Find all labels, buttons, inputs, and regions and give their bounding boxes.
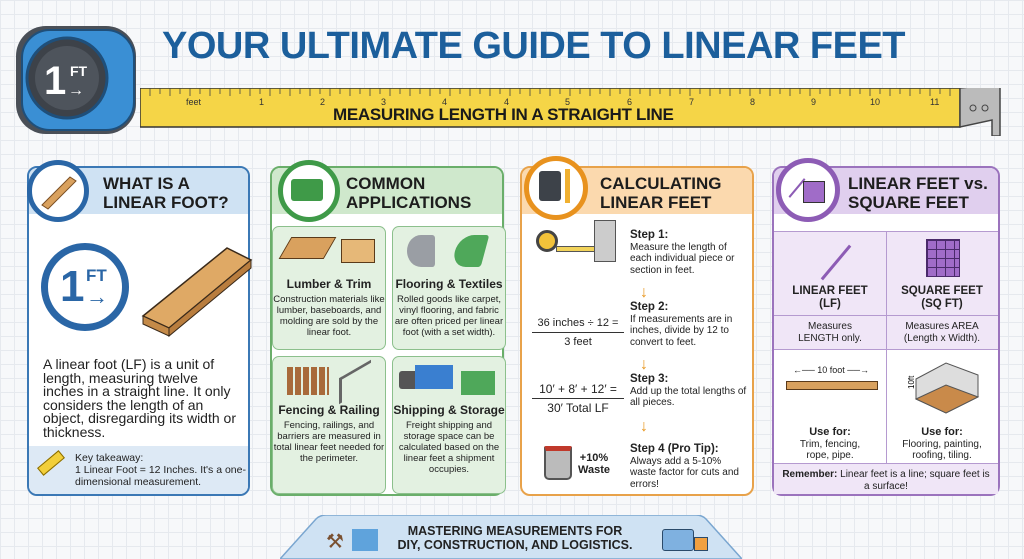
comparison grid: roofing, tiling. — [912, 450, 972, 461]
step 2: If measurements are in inches, divide by 12 to convert to feet. — [630, 314, 732, 348]
heading — [346, 174, 471, 212]
definition text: A linear foot (LF) is a unit of length, measuring twelve inches in a straight line. It only considers the length of an object, disregarding its width or thickness. — [43, 356, 236, 440]
icon: tape measure body — [16, 26, 136, 134]
tape ruler: 4 — [442, 97, 447, 107]
icon: 1 FT: → — [86, 284, 108, 309]
icon: toolbox — [278, 160, 340, 222]
tape ruler: 2 — [320, 97, 325, 107]
step 3 — [630, 373, 746, 408]
icon: room floor — [907, 362, 980, 414]
key takeaway — [29, 446, 248, 494]
comparison grid: (Length x Width). — [904, 332, 980, 344]
equation 2: 10′ + 8′ + 12′ = — [539, 382, 617, 396]
tape ruler — [140, 88, 1001, 136]
waste label: +10% — [580, 452, 608, 464]
heading — [103, 174, 229, 212]
label SQ FT — [901, 285, 983, 310]
comparison grid: Flooring, painting, — [902, 438, 982, 450]
card: fencing: Fencing & Railing — [278, 403, 380, 417]
arrow: ↓ — [640, 284, 648, 301]
subtitle: MEASURING LENGTH IN A STRAIGHT LINE — [333, 105, 674, 124]
comparison grid: Measures AREA — [905, 321, 979, 332]
card: shipping: Shipping & Storage — [393, 403, 505, 417]
white lower cells — [774, 350, 886, 463]
label LF: LINEAR FEET — [792, 285, 868, 297]
heading: CALCULATING — [600, 174, 722, 193]
tape ruler: 8 — [750, 97, 755, 107]
card: flooring: Flooring & Textiles — [395, 277, 503, 291]
card: lumber: Construction materials like lumber, baseboards, and molding are sold by the linear foot. — [273, 294, 385, 338]
tape ruler: 9 — [811, 97, 816, 107]
equation 1 — [532, 317, 624, 348]
tape ruler: 5 — [565, 97, 570, 107]
key takeaway: 1 Linear Foot = 12 Inches. It's a one-dimensional measurement. — [75, 464, 246, 488]
card: fencing — [272, 356, 386, 494]
tape ruler: 4 — [504, 97, 509, 107]
footer text: MASTERING MEASUREMENTS FOR — [408, 524, 622, 538]
equation 1: 36 inches ÷ 12 = — [538, 317, 618, 329]
comparison grid: Measures — [808, 321, 852, 332]
icon: 1 FT: 1 — [60, 262, 84, 311]
card: shipping: Freight shipping and storage space can be calculated based on the linear feet a shipment occupies. — [399, 420, 499, 475]
step 3: Step 3: — [630, 373, 668, 385]
icon: 1 FT — [41, 243, 129, 331]
key takeaway: Key takeaway: — [75, 452, 143, 464]
icon: wooden plank — [142, 247, 252, 337]
footer text: DIY, CONSTRUCTION, AND LOGISTICS. — [398, 538, 632, 552]
comparison grid: Use for: — [921, 426, 963, 438]
label SQ FT: SQUARE FEET — [901, 285, 983, 297]
comparison grid: Trim, fencing, — [800, 438, 860, 450]
icon: 1 FT: FT — [86, 266, 107, 285]
tape ruler: feet — [186, 97, 202, 107]
equation 2: 30′ Total LF — [547, 401, 609, 415]
step 2: Step 2: — [630, 301, 668, 313]
card: flooring: Rolled goods like carpet, vinyl flooring, and fabric are often priced per linear foot (with a set width). — [395, 294, 503, 338]
icon: line and square — [776, 158, 840, 222]
equation 2 — [532, 382, 624, 415]
card: flooring — [392, 226, 506, 350]
icon: hammer and blueprint — [326, 529, 378, 553]
equation 1: 3 feet — [564, 336, 592, 348]
step 1: Step 1: — [630, 229, 668, 241]
label LF — [792, 285, 868, 310]
footer text — [398, 524, 632, 552]
title: YOUR ULTIMATE GUIDE TO LINEAR FEET — [162, 25, 905, 67]
label LF: (LF) — [819, 298, 841, 310]
heading: SQUARE FEET — [848, 193, 969, 212]
remember note: Remember: Linear feet is a line; square feet is a surface! — [782, 469, 990, 492]
card: fencing: Fencing, railings, and barriers are measured in total linear feet needed for the perimeter. — [274, 420, 384, 464]
icon: tape measure body: → — [68, 82, 84, 99]
tape ruler: 11 — [930, 97, 939, 107]
tape ruler: 6 — [627, 97, 632, 107]
heading — [600, 174, 722, 212]
icon: room floor: 10ft — [907, 375, 916, 389]
step 3: Add up the total lengths of all pieces. — [630, 386, 746, 408]
icon: calculator — [524, 156, 588, 220]
icon: truck — [662, 529, 708, 551]
waste label: Waste — [578, 464, 610, 476]
icon: grid square — [926, 239, 960, 277]
panel: what is a linear foot — [27, 166, 250, 496]
arrow: ↓ — [640, 356, 648, 373]
tape ruler: 10 — [870, 97, 880, 107]
heading: COMMON — [346, 174, 425, 193]
icon: tape measure body: FT — [70, 63, 88, 79]
heading: APPLICATIONS — [346, 193, 471, 212]
heading: LINEAR FEET — [600, 193, 711, 212]
card: lumber: Lumber & Trim — [287, 277, 371, 291]
panel: calculating linear feet — [520, 166, 754, 496]
comparison grid: rope, pipe. — [806, 450, 854, 461]
icon: waste bin — [544, 446, 572, 480]
footer banner — [280, 515, 742, 559]
heading: LINEAR FEET vs. — [848, 174, 988, 193]
step 4: Step 4 (Pro Tip): — [630, 443, 719, 455]
icon: 10 foot board: ←── 10 foot ──→ — [793, 365, 869, 375]
arrow: ↓ — [640, 418, 648, 435]
step 4: Always add a 5-10% waste factor for cuts and errors! — [630, 456, 739, 490]
card: shipping — [392, 356, 506, 494]
label SQ FT: (SQ FT) — [921, 298, 963, 310]
icon: line — [821, 245, 851, 280]
icon: tape measure and wall — [536, 220, 616, 262]
tape ruler: 1 — [259, 97, 264, 107]
heading: WHAT IS A — [103, 174, 190, 193]
icon: plank circle — [27, 160, 89, 222]
step 1: Measure the length of each individual piece or section in feet. — [630, 242, 735, 276]
card: lumber — [272, 226, 386, 350]
heading: LINEAR FOOT? — [103, 193, 229, 212]
comparison grid: LENGTH only. — [798, 332, 862, 344]
heading — [848, 174, 988, 212]
icon: tape measure body: 1 — [44, 59, 66, 103]
tape ruler: 3 — [381, 97, 386, 107]
waste label — [578, 452, 610, 476]
tape ruler: 7 — [689, 97, 694, 107]
panel: linear vs square — [772, 166, 1000, 496]
panel: common applications — [270, 166, 504, 496]
icon: hammer and blueprint: ⚒ — [326, 531, 344, 553]
comparison grid: Use for: — [809, 426, 851, 438]
comparison grid — [774, 231, 998, 494]
